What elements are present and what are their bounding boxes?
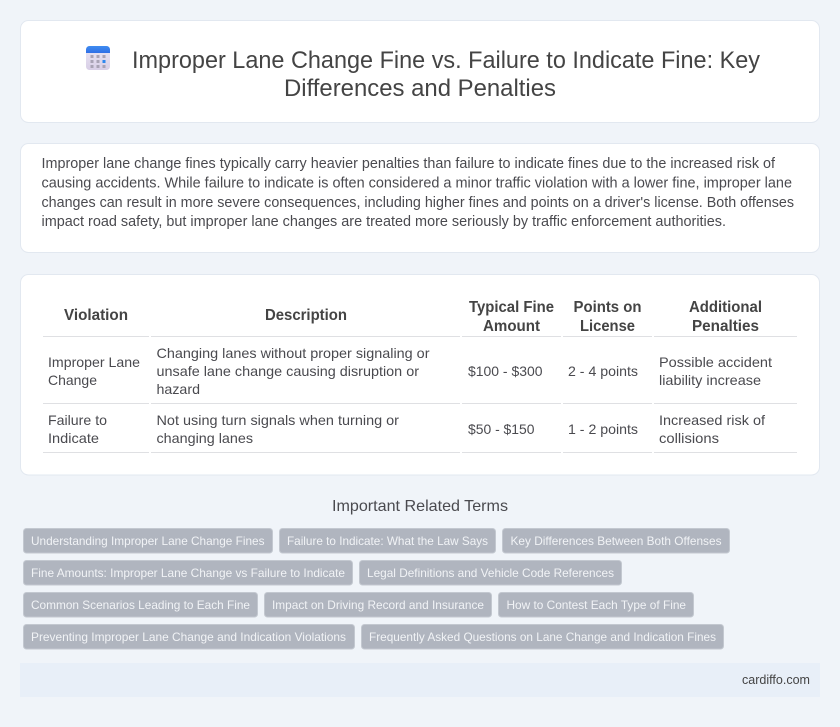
table row: improper lane change: Changing lanes without proper signaling or <box>156 345 430 361</box>
table row: improper lane change: liability increase <box>659 372 761 388</box>
table row: improper lane change: $100 - $300 <box>468 363 543 379</box>
tag <box>24 528 272 553</box>
table row: improper lane change: hazard <box>156 381 200 397</box>
table row: failure to indicate: Not using turn signals when turning or <box>156 412 399 428</box>
tag: Impact on Driving Record and Insurance <box>272 598 484 612</box>
title <box>132 47 760 102</box>
table row: improper lane change: Possible accident <box>659 354 772 370</box>
title: Improper Lane Change Fine vs. Failure to Indicate Fine: Key <box>132 47 760 74</box>
text block: summary: impact road safety, but improper lane changes are treated more seriously by traffic enforcement authorities. <box>42 214 726 230</box>
table row: failure to indicate: Failure to <box>48 412 107 428</box>
tag <box>264 592 492 617</box>
tag list: related terms <box>24 528 730 649</box>
table row: failure to indicate: $50 - $150 <box>468 421 535 437</box>
tag <box>24 592 258 617</box>
footer: cardiffo.com <box>742 672 810 687</box>
table row: improper lane change: unsafe lane change causing disruption or <box>156 363 419 379</box>
tag: Fine Amounts: Improper Lane Change vs Failure to Indicate <box>31 566 345 580</box>
tag <box>498 592 694 617</box>
tag: Preventing Improper Lane Change and Indication Violations <box>31 630 346 644</box>
title: Differences and Penalties <box>284 75 556 102</box>
panel: summary paragraph <box>20 144 820 252</box>
heading: related terms: Important Related Terms <box>332 498 508 515</box>
table header: Violation <box>64 307 128 324</box>
panel: header <box>20 20 820 122</box>
table header: Additional <box>689 299 762 316</box>
table header: Points on <box>574 299 642 316</box>
tag: Key Differences Between Both Offenses <box>510 534 722 548</box>
tag <box>24 560 352 585</box>
table row: failure to indicate: Indicate <box>48 430 99 446</box>
table row: improper lane change <box>48 345 772 397</box>
footer <box>20 663 820 697</box>
tag: Common Scenarios Leading to Each Fine <box>31 598 250 612</box>
table header: Amount <box>483 318 541 335</box>
tag: Legal Definitions and Vehicle Code References <box>367 566 614 580</box>
text block: summary <box>42 156 794 230</box>
tag <box>360 560 622 585</box>
text block: summary: changes can result in more severe consequences, including higher fines and points on a driver's license. Both offenses <box>42 195 794 211</box>
tag <box>362 624 724 649</box>
table header: Description <box>265 307 347 324</box>
text block: summary: causing accidents. While failure to indicate is often considered a minor traffic violation with a lower fine, improper lane <box>42 176 792 192</box>
icon: calendar <box>86 46 110 70</box>
table row: failure to indicate: Increased risk of <box>659 412 765 428</box>
table row: failure to indicate <box>48 412 765 446</box>
table row: failure to indicate: changing lanes <box>156 430 253 446</box>
panel: comparison table <box>20 274 820 475</box>
tag <box>280 528 496 553</box>
table row: failure to indicate: collisions <box>659 430 719 446</box>
table row: improper lane change: Improper Lane <box>48 354 140 370</box>
table header: License <box>580 318 635 335</box>
table row: failure to indicate: 1 - 2 points <box>568 421 638 437</box>
table header <box>64 299 762 335</box>
tag <box>502 528 730 553</box>
table header: Typical Fine <box>469 299 554 316</box>
table header: Penalties <box>692 318 759 335</box>
tag: Failure to Indicate: What the Law Says <box>287 534 488 548</box>
tag: Understanding Improper Lane Change Fines <box>31 534 264 548</box>
tag: Frequently Asked Questions on Lane Change and Indication Fines <box>369 630 716 644</box>
table row: improper lane change: Change <box>48 372 97 388</box>
table row: improper lane change: 2 - 4 points <box>568 363 638 379</box>
tag <box>24 624 354 649</box>
tag: How to Contest Each Type of Fine <box>506 598 686 612</box>
text block: summary: Improper lane change fines typically carry heavier penalties than failure to indicate fines due to the increased risk of <box>42 156 776 172</box>
